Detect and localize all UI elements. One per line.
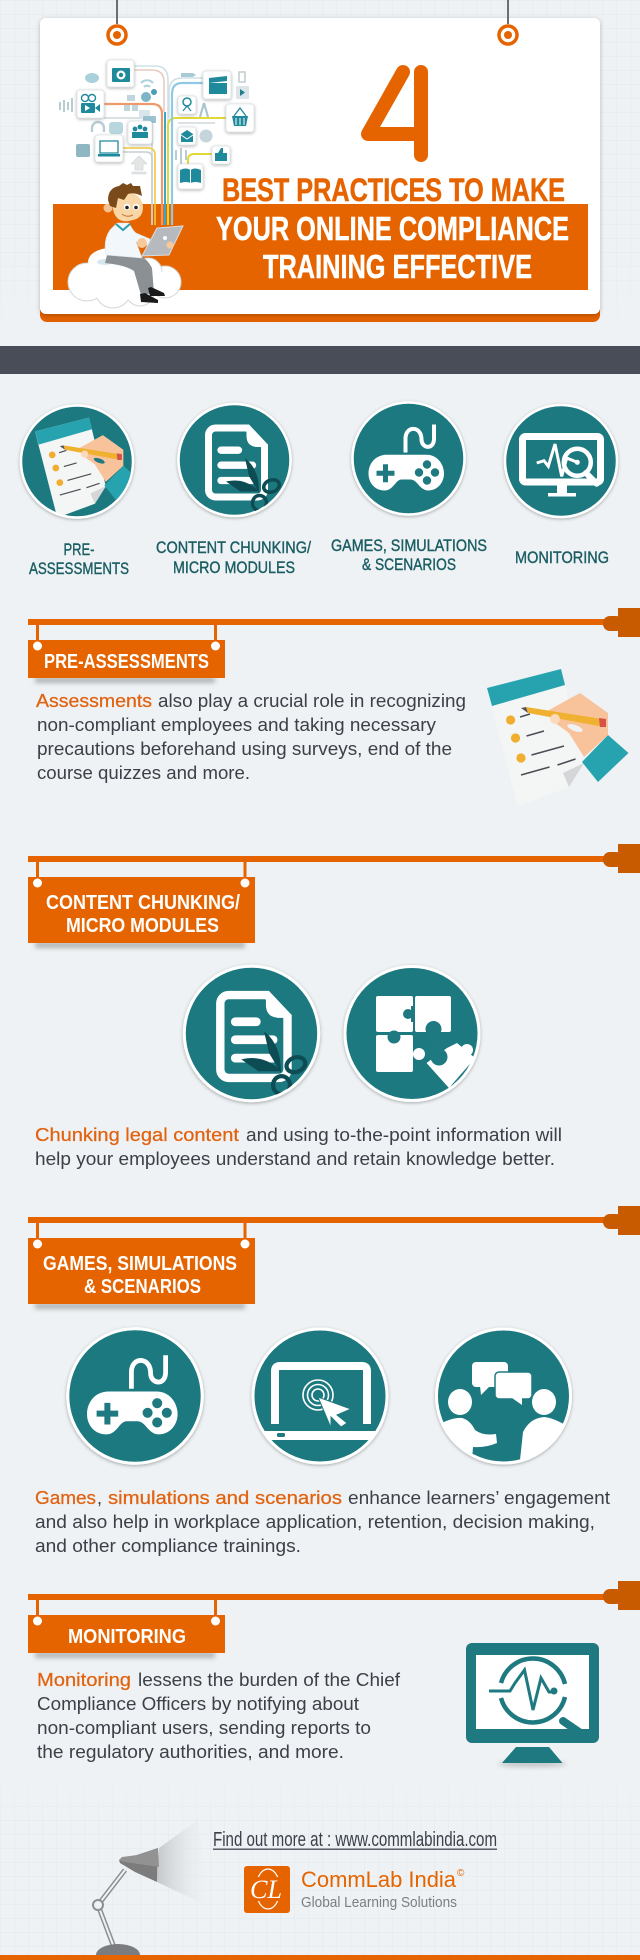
overview label: games: GAMES, SIMULATIONS — [331, 536, 487, 555]
section heading tag — [28, 877, 255, 948]
overview label: pre-assessments: ASSESSMENTS — [29, 559, 129, 578]
panel: section 2 content chunking — [28, 844, 640, 1169]
cloud — [68, 250, 181, 308]
body text — [35, 1488, 610, 1556]
logo: CommLab India: © — [457, 1868, 465, 1879]
body text: and using to-the-point information will — [246, 1125, 562, 1145]
overview label: pre-assessments — [29, 540, 129, 578]
hands — [137, 238, 147, 248]
tablet — [142, 226, 183, 256]
overview label: pre-assessments: PRE- — [64, 540, 94, 559]
overview label: monitoring: MONITORING — [515, 548, 609, 567]
body text: course quizzes and more. — [37, 763, 250, 783]
overview icon: content chunking — [178, 404, 290, 516]
body text: Monitoring — [37, 1670, 131, 1690]
body text: enhance learners’ engagement — [348, 1488, 610, 1508]
section heading tag: MICRO MODULES — [66, 915, 219, 937]
body text: Chunking legal content — [35, 1125, 239, 1145]
body text: the regulatory authorities, and more. — [37, 1742, 344, 1762]
body text: also play a crucial role in recognizing — [158, 691, 466, 711]
body text: simulations and scenarios — [108, 1488, 342, 1508]
body text: , — [97, 1488, 102, 1508]
overview icon: games — [352, 402, 464, 514]
section heading tag: MONITORING — [68, 1626, 186, 1648]
body text: non-compliant employees and taking necessary — [37, 715, 436, 735]
illustration: icon tiles — [77, 60, 254, 189]
overview label: games: & SCENARIOS — [362, 555, 456, 574]
body text: Assessments — [36, 691, 152, 711]
numeral 4 — [368, 72, 421, 163]
illustration: monitor with magnifier — [466, 1643, 599, 1767]
title text — [216, 172, 569, 285]
orange title band — [53, 204, 588, 290]
illustration: desk lamp — [93, 1820, 212, 1955]
illustration: boy on cloud with tablet — [68, 183, 183, 308]
body text: help your employees understand and retain knowledge better. — [35, 1149, 555, 1169]
body text: and also help in workplace application, retention, decision making, — [35, 1512, 595, 1532]
logo: CommLab India: CL — [250, 1875, 282, 1904]
section heading tag — [28, 1615, 225, 1658]
overview label: content chunking — [156, 538, 311, 577]
overview label: games — [331, 536, 487, 574]
hanging ring left — [108, 0, 126, 44]
overview label: content chunking: CONTENT CHUNKING/ — [156, 538, 311, 557]
bottom orange rule — [0, 1955, 640, 1960]
icon: laptop with cursor — [253, 1329, 387, 1463]
face — [113, 191, 143, 221]
illustration: tile glyphs — [81, 68, 248, 183]
body text: precautions beforehand using surveys, end of the — [37, 739, 452, 759]
illustration: small pale icons — [59, 72, 249, 174]
rail and connector — [28, 1581, 640, 1617]
shirt — [105, 223, 150, 258]
logo: CommLab India: CommLab India — [301, 1867, 457, 1892]
panel: footer — [93, 1820, 497, 1955]
hair — [108, 183, 142, 208]
icon: game controller — [68, 1329, 202, 1463]
dark divider band — [0, 346, 640, 374]
icon: document and scissors — [184, 966, 319, 1101]
body text: Games — [35, 1488, 96, 1508]
logo: CommLab India — [244, 1866, 465, 1913]
hanging ring right — [499, 0, 517, 44]
body text: Compliance Officers by notifying about — [37, 1694, 359, 1714]
section heading tag: PRE-ASSESSMENTS — [44, 651, 209, 673]
panel: overview of the four practices — [21, 402, 617, 578]
section heading tag — [28, 640, 225, 683]
panel: section 3 games, simulations and scenarios — [28, 1206, 640, 1556]
panel: section 4 monitoring — [28, 1581, 640, 1767]
rail and connector — [28, 844, 640, 879]
logo: CommLab India: Global Learning Solutions — [301, 1895, 457, 1911]
illustration: app tree connector lines — [104, 66, 226, 225]
trousers — [105, 255, 154, 295]
panel: section 1 pre-assessments — [28, 608, 640, 806]
rail and connector — [28, 608, 640, 642]
eyes — [124, 204, 130, 210]
panel: hero title card — [40, 0, 600, 322]
body text: lessens the burden of the Chief — [138, 1670, 401, 1690]
overview label: content chunking: MICRO MODULES — [173, 558, 295, 577]
body text: and other compliance trainings. — [35, 1536, 301, 1556]
body text — [36, 691, 466, 783]
rail and connector — [28, 1206, 640, 1240]
section heading tag: GAMES, SIMULATIONS — [43, 1253, 237, 1275]
section heading tag — [28, 1238, 255, 1309]
overview icon: monitoring — [505, 405, 617, 517]
overview icon: pre-assessments — [21, 406, 138, 518]
body text — [35, 1125, 562, 1169]
shoes — [140, 287, 165, 303]
section heading tag: & SCENARIOS — [84, 1276, 201, 1298]
title text: TRAINING EFFECTIVE — [263, 248, 532, 285]
body text: non-compliant users, sending reports to — [37, 1718, 371, 1738]
section heading tag: CONTENT CHUNKING/ — [46, 892, 240, 914]
icon: puzzle — [345, 966, 479, 1100]
call to action link: Find out more at : www.commlabindia.com — [213, 1829, 497, 1851]
icon: conversation — [436, 1329, 570, 1463]
illustration: checklist and hand — [487, 669, 628, 806]
body text — [37, 1670, 401, 1762]
